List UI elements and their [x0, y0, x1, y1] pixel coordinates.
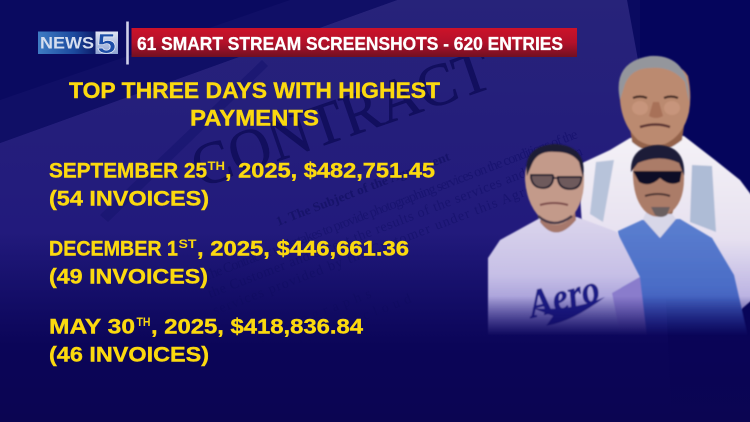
entry: May 30th: (46 INVOICES) — [49, 342, 209, 366]
title: PAYMENTS — [190, 106, 319, 131]
divider — [126, 22, 129, 64]
entry: September 25th — [49, 158, 435, 210]
entry: December 1st: ST — [178, 237, 197, 251]
contract document text: the Customer and accept the results of the services and pay them — [206, 144, 585, 302]
title — [69, 78, 440, 131]
entry: December 1st: (49 INVOICES) — [49, 264, 208, 288]
contract document text: photographs — [256, 287, 373, 344]
entry: December 1st: , 2025, $446,661.36 — [197, 236, 409, 260]
contract document text: The Contractor undertakes to provide photographing services on the conditions of the — [201, 127, 580, 285]
man in blue shirt — [618, 145, 750, 345]
entry: May 30th: TH — [136, 315, 150, 329]
entry: September 25th: , 2025, $482,751.45 — [225, 158, 435, 182]
entry: May 30th: MAY 30 — [49, 314, 135, 338]
contract document text: 1. The Subject of the Agreement — [274, 148, 452, 229]
headline banner: 61 SMART STREAM SCREENSHOTS - 620 ENTRIES — [137, 34, 563, 54]
headline banner — [132, 28, 577, 57]
entry: September 25th: (54 INVOICES) — [49, 186, 209, 210]
logo: News 5: NEWS — [40, 34, 94, 52]
entry: September 25th: TH — [208, 159, 225, 173]
contract document text: in the cloud — [296, 292, 413, 349]
entry: September 25th: SEPTEMBER 25 — [49, 158, 207, 182]
logo: News 5: 5 — [97, 28, 116, 59]
contract document text — [183, 36, 585, 349]
man in white Aero t-shirt — [488, 144, 648, 345]
photo: three men — [488, 56, 750, 345]
contract document text: services provided by the Customer under this Agreement — [211, 169, 571, 319]
man in white guayabera — [580, 54, 750, 310]
man in white Aero t-shirt: Aero — [521, 266, 604, 327]
entry: May 30th — [49, 314, 363, 366]
entry: December 1st — [49, 236, 409, 288]
entry: May 30th: , 2025, $418,836.84 — [151, 314, 363, 338]
logo: News 5 — [38, 28, 118, 59]
title: TOP THREE DAYS WITH HIGHEST — [69, 78, 440, 103]
contract document text: CONTRACT — [183, 36, 499, 200]
entry: December 1st: DECEMBER 1 — [49, 236, 178, 260]
